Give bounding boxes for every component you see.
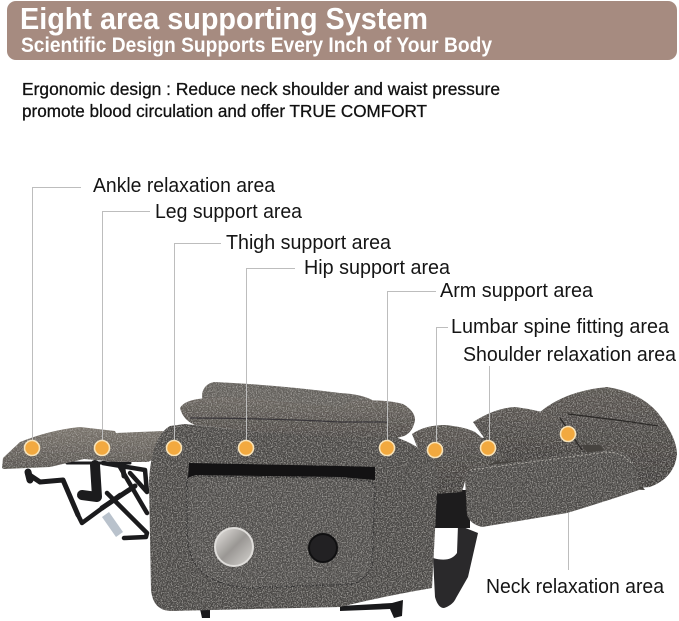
mechanism steel rod	[102, 512, 123, 537]
rocker base	[433, 525, 478, 608]
title: Eight area supporting System	[20, 1, 428, 36]
wing stitching	[470, 452, 632, 470]
metal cup holder button	[215, 528, 253, 566]
lumbar cushion	[412, 425, 507, 494]
upholstery	[2, 382, 677, 611]
callout: hip: Hip support area	[304, 257, 451, 279]
callout: thigh	[166, 232, 392, 456]
recliner chair illustration	[2, 382, 677, 618]
callout: neck	[486, 426, 665, 598]
lower arm pillow	[180, 397, 415, 440]
shoulder cushion	[473, 407, 590, 462]
chair body side	[149, 424, 438, 611]
footrest	[2, 427, 163, 469]
intro text	[22, 79, 500, 121]
footrest mechanism	[28, 462, 147, 538]
callout: shoulder: Shoulder relaxation area	[463, 344, 677, 366]
front pocket	[187, 476, 375, 588]
callout: leg	[94, 201, 303, 456]
callout: neck: Neck relaxation area	[486, 576, 665, 598]
headrest seam	[560, 414, 658, 450]
callout: ankle: Ankle relaxation area	[93, 175, 276, 197]
upper arm pillow	[202, 382, 374, 412]
callout: ankle	[24, 175, 276, 456]
side wing panel	[465, 450, 639, 527]
callout: shoulder	[463, 344, 677, 456]
callout: arm	[380, 280, 594, 456]
cushion backing	[470, 436, 645, 490]
callout: thigh: Thigh support area	[226, 232, 392, 254]
callout: lumbar	[428, 316, 670, 458]
callout: lumbar: Lumbar spine fitting area	[451, 316, 670, 338]
callout: leg: Leg support area	[155, 201, 303, 223]
callout: arm: Arm support area	[440, 280, 594, 302]
dark seat gap	[430, 490, 470, 528]
intro text: promote blood circulation and offer TRUE COMFORT	[22, 101, 427, 121]
headrest	[540, 387, 677, 488]
callout: hip	[238, 257, 451, 456]
arm pillow seam	[190, 418, 388, 422]
pocket slot	[188, 463, 375, 480]
subtitle: Scientific Design Supports Every Inch of Your Body	[21, 34, 492, 57]
intro text: Ergonomic design : Reduce neck shoulder and waist pressure	[22, 79, 500, 99]
floor foot	[200, 600, 403, 618]
header banner	[7, 1, 677, 60]
dark wireless charger button	[309, 534, 337, 562]
